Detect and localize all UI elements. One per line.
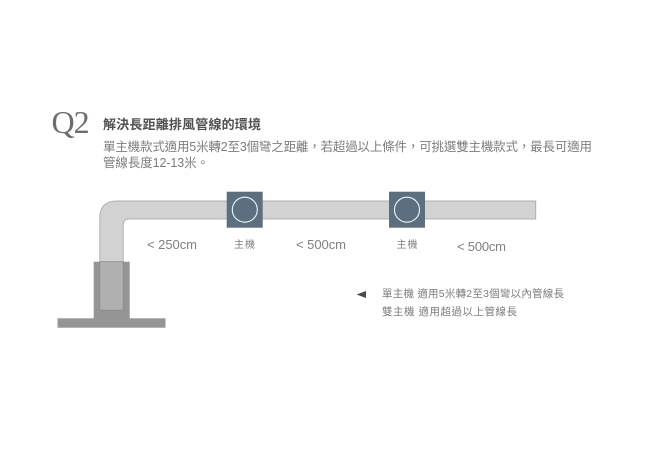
Q2 marker: Q2 (52, 104, 89, 140)
legend text: 單主機 適用5米轉2至3個彎以內管線長 (382, 287, 564, 300)
legend text: 雙主機 適用超過以上管線長 (382, 305, 518, 318)
diagram: base wall mount (58, 262, 166, 328)
label: under 500cm first: < 500cm (296, 237, 346, 252)
label: under 500cm second: < 500cm (457, 239, 506, 254)
icon: main unit 1 (227, 192, 263, 228)
icon: left arrow (356, 291, 366, 298)
heading: 解決長距離排風管線的環境 (103, 117, 261, 132)
body text: 單主機款式適用5米轉2至3個彎之距離，若超過以上條件，可挑選雙主機款式，最長可適用 (103, 139, 592, 154)
icon: main unit 2 (389, 192, 425, 228)
label: main unit 2: 主機 (396, 238, 418, 251)
label: under 250cm: < 250cm (147, 237, 197, 252)
diagram: duct pipe (100, 201, 536, 262)
diagram: pipe inserted in base (100, 262, 123, 310)
legend text (382, 287, 564, 318)
body text: 管線長度12-13米。 (103, 155, 209, 170)
body text (103, 139, 592, 170)
label: main unit 1: 主機 (234, 238, 255, 251)
